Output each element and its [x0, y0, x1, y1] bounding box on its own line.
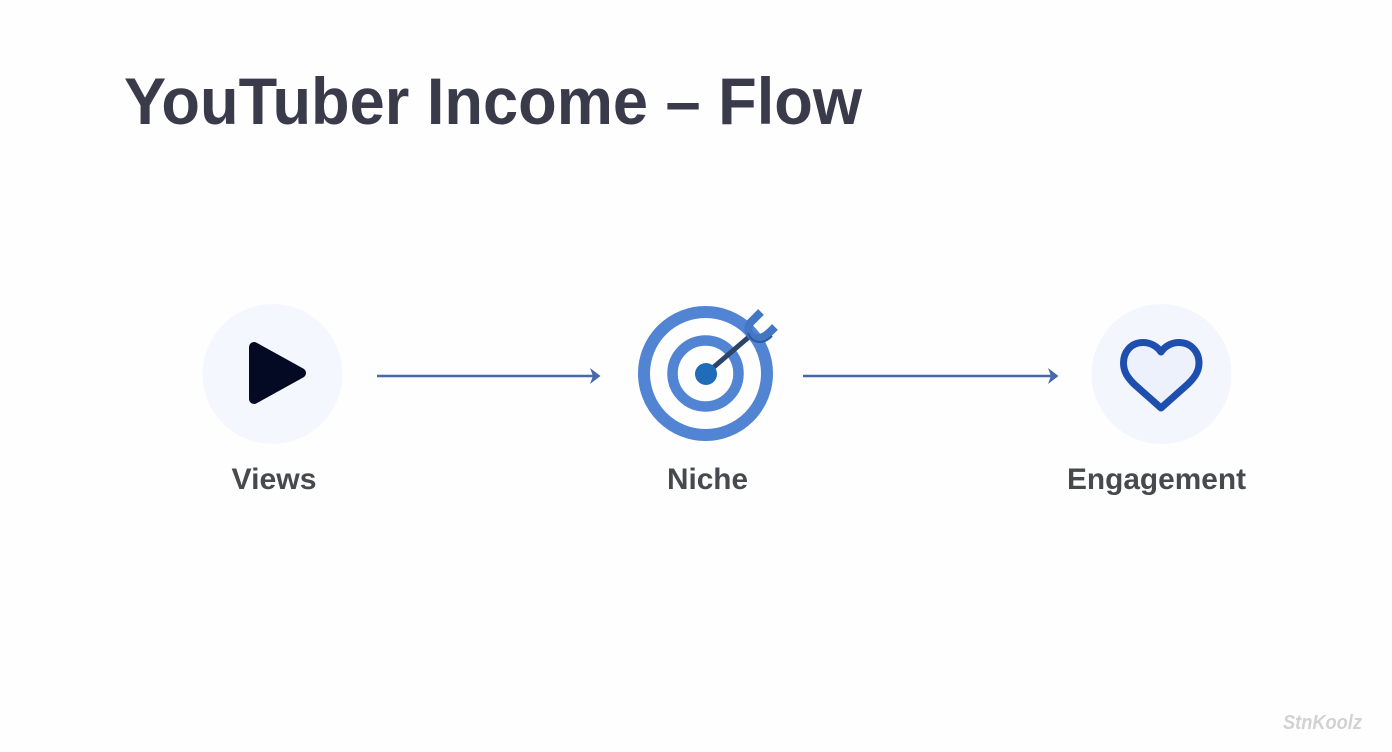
arrow: Niche to Engagement: [803, 368, 1058, 384]
label: Views: Views: [232, 463, 316, 496]
step: Niche: [644, 312, 775, 496]
icon: play button: [202, 304, 342, 444]
step: Engagement: [1067, 304, 1246, 496]
label: Niche: Niche: [667, 463, 748, 496]
step: Views: [202, 304, 342, 496]
title: YouTuber Income – Flow: [124, 64, 863, 138]
icon: target with dart: [644, 312, 775, 435]
arrow: Views to Niche: [377, 368, 600, 384]
label: Engagement: Engagement: [1067, 463, 1246, 496]
icon: heart: [1092, 304, 1232, 444]
watermark: StnKoolz: [1283, 712, 1362, 734]
